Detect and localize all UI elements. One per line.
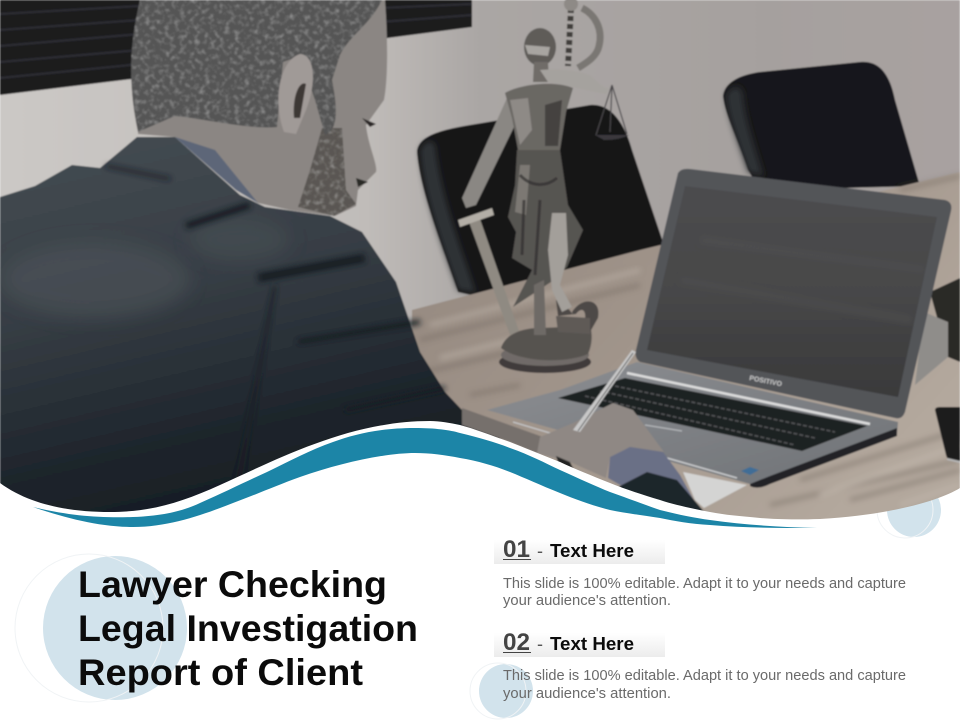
teal wave	[33, 428, 817, 528]
photo: lawyer at desk	[0, 0, 960, 530]
phone	[935, 407, 960, 462]
item 02 description: This slide is 100% editable. Adapt it to your needs and capture	[503, 668, 906, 684]
decorative circle: upper right	[877, 482, 941, 538]
window blinds	[0, 0, 472, 95]
left hand	[462, 408, 543, 453]
title: Lawyer Checking	[78, 564, 387, 605]
decorative circle: title backdrop	[15, 554, 187, 702]
box and dark object behind laptop	[915, 278, 960, 385]
head and face	[138, 0, 387, 216]
item 02 heading	[494, 629, 665, 657]
decorative circle: lower text	[470, 663, 533, 719]
title: Legal Investigation	[78, 608, 418, 649]
item 02 heading: Text Here	[550, 634, 634, 654]
item 02 description	[503, 668, 906, 702]
item 01 heading: 01	[503, 536, 530, 563]
suit jacket	[0, 137, 500, 530]
item 01 description: This slide is 100% editable. Adapt it to your needs and capture	[503, 576, 906, 592]
chair right	[723, 62, 920, 190]
statue of justice	[458, 0, 629, 373]
beard	[298, 128, 356, 216]
item 01 heading: -	[537, 541, 543, 561]
item 01 description	[503, 576, 906, 609]
title: Report of Client	[78, 652, 363, 693]
paper	[683, 472, 747, 508]
ear	[278, 54, 313, 134]
item 01 heading: Text Here	[550, 541, 634, 561]
item 02 heading: 02	[503, 629, 530, 656]
title	[78, 564, 418, 693]
item 02 heading: -	[537, 634, 543, 654]
table	[412, 172, 960, 530]
item 02 description: your audience's attention.	[503, 686, 671, 702]
laptop logo: POSITIVO	[749, 375, 783, 388]
shirt cuff and sleeve	[608, 447, 706, 514]
item 01 description: your audience's attention.	[503, 593, 671, 609]
hair	[131, 0, 382, 135]
laptop	[487, 169, 951, 488]
right hand and pen	[537, 350, 664, 478]
chair left	[417, 105, 664, 297]
item 01 heading	[494, 536, 665, 564]
